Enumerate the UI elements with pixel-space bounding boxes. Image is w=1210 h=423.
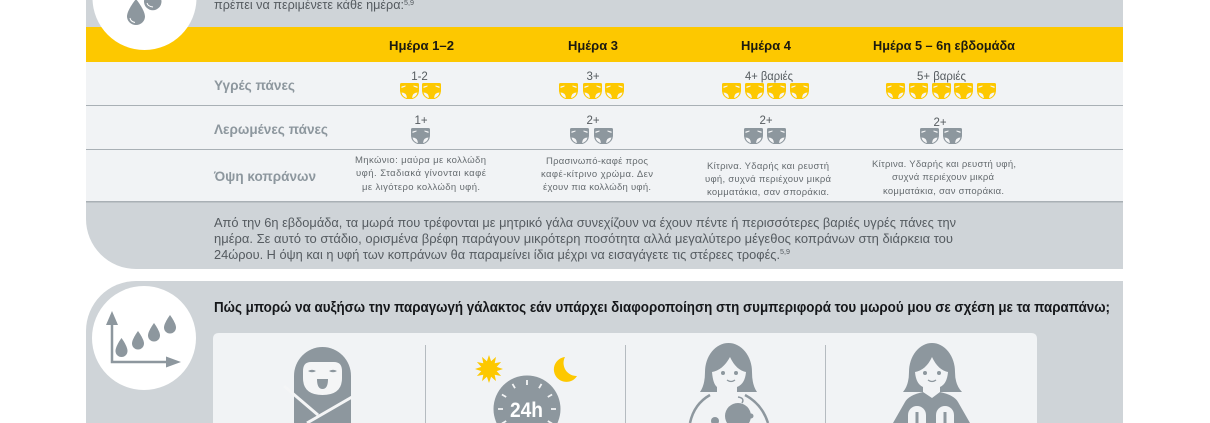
table column headings: Ημέρα 5 – 6η εβδομάδα xyxy=(873,39,1015,53)
wet diaper counts: 1-2 xyxy=(411,71,428,83)
table column headings: Ημέρα 4 xyxy=(741,39,791,53)
stool description: day 5 to week 6 xyxy=(872,159,1016,197)
stool description: day 3: Πρασινωπό-καφέ προς xyxy=(546,156,648,167)
panel: daily diaper table xyxy=(86,0,1123,269)
header band xyxy=(86,27,1123,62)
soiled diaper counts: 2+ xyxy=(586,115,600,127)
icon: milk drops in circle xyxy=(92,0,196,50)
stool description: day 4: υφή, συχνά περιέχουν μικρά xyxy=(705,174,832,185)
wet diaper counts: 3+ xyxy=(586,71,600,83)
stool description: day 5 to week 6: Κίτρινα. Υδαρής και ρευστή υφή, xyxy=(872,159,1016,170)
panel background xyxy=(86,0,1123,269)
stool description: day 1-2 xyxy=(355,155,487,193)
icon: mother expressing milk xyxy=(893,343,970,423)
soiled diaper counts: 2+ xyxy=(759,115,773,127)
icons: yellow wet diapers xyxy=(400,83,996,99)
stool description: day 5 to week 6: κομματάκια, σαν σποράκια. xyxy=(883,186,1004,197)
icon: mother breastfeeding xyxy=(690,343,768,423)
wet diaper counts xyxy=(411,71,966,83)
card with four tips xyxy=(213,333,1037,423)
icons: grey soiled diapers xyxy=(411,128,962,144)
stool description: day 4: Κίτρινα. Υδαρής και ρευστή xyxy=(707,161,829,172)
table column headings: Ημέρα 1–2 xyxy=(389,39,454,53)
soiled diaper counts: 1+ xyxy=(414,115,428,127)
paragraph: from week 6: 5,9 xyxy=(780,247,790,256)
soiled diaper counts xyxy=(414,115,947,129)
icon: swaddled baby xyxy=(284,347,352,423)
table column headings xyxy=(389,39,1015,53)
table column headings: Ημέρα 3 xyxy=(568,39,618,53)
paragraph: from week 6: ημέρα. Σε αυτό το στάδιο, ορισμένα βρέφη παράγουν μικρότερη ποσότητα αλλά μεγαλύτερο μέγεθος κοπράνων στη διάρκεια του xyxy=(214,231,953,246)
stool description: day 4: κομματάκια, σαν σποράκια. xyxy=(707,187,829,198)
stool description: day 3: καφέ-κίτρινο χρώμα. Δεν xyxy=(541,169,653,180)
stool description: day 5 to week 6: συχνά περιέχουν μικρά xyxy=(892,172,994,183)
paragraph: from week 6: Από την 6η εβδομάδα, τα μωρά που τρέφονται με μητρικό γάλα συνεχίζουν να έχουν πέντε ή περισσότερες βαριές υγρές πάνες την xyxy=(214,215,956,230)
soiled diaper counts: 2+ xyxy=(933,117,947,129)
wet diaper counts: 4+ βαριές xyxy=(745,71,793,83)
panel background xyxy=(86,281,1123,423)
row label: wet diapers: Υγρές πάνες xyxy=(214,77,295,93)
stool description: day 1-2: με λιγότερο κολλώδη υφή. xyxy=(362,182,480,193)
row label: stool appearance: Όψη κοπράνων xyxy=(213,168,316,184)
stool description: day 3 xyxy=(541,156,653,193)
paragraph: from week 6 xyxy=(214,215,956,262)
stool description: day 1-2: Μηκώνιο: μαύρα με κολλώδη xyxy=(355,155,486,166)
icon: sun, moon and 24h clock xyxy=(475,355,577,423)
icon: rising drops chart xyxy=(92,286,196,390)
heading question: Πώς μπορώ να αυξήσω την παραγωγή γάλακτος εάν υπάρχει διαφοροποίηση στη συμπεριφορά του μωρού μου σε σχέση με τα παραπάνω; xyxy=(214,300,1110,316)
panel: increasing milk production xyxy=(86,281,1123,423)
row label: soiled diapers: Λερωμένες πάνες xyxy=(214,121,328,137)
stool description: day 3: έχουν πια κολλώδη υφή. xyxy=(543,182,651,193)
paragraph: from week 6: 24ώρου. Η όψη και η υφή των κοπράνων θα παραμείνει ίδια μέχρι να εισαγάγετε τις στέρεες τροφές. xyxy=(214,247,780,262)
stool description: day 1-2: υφή. Σταδιακά γίνονται καφέ xyxy=(356,168,487,179)
table rows background xyxy=(86,62,1123,202)
stool description: day 4 xyxy=(705,161,832,198)
wet diaper counts: 5+ βαριές xyxy=(917,71,966,83)
icon: sun, moon and 24h clock: 24h xyxy=(510,399,543,422)
